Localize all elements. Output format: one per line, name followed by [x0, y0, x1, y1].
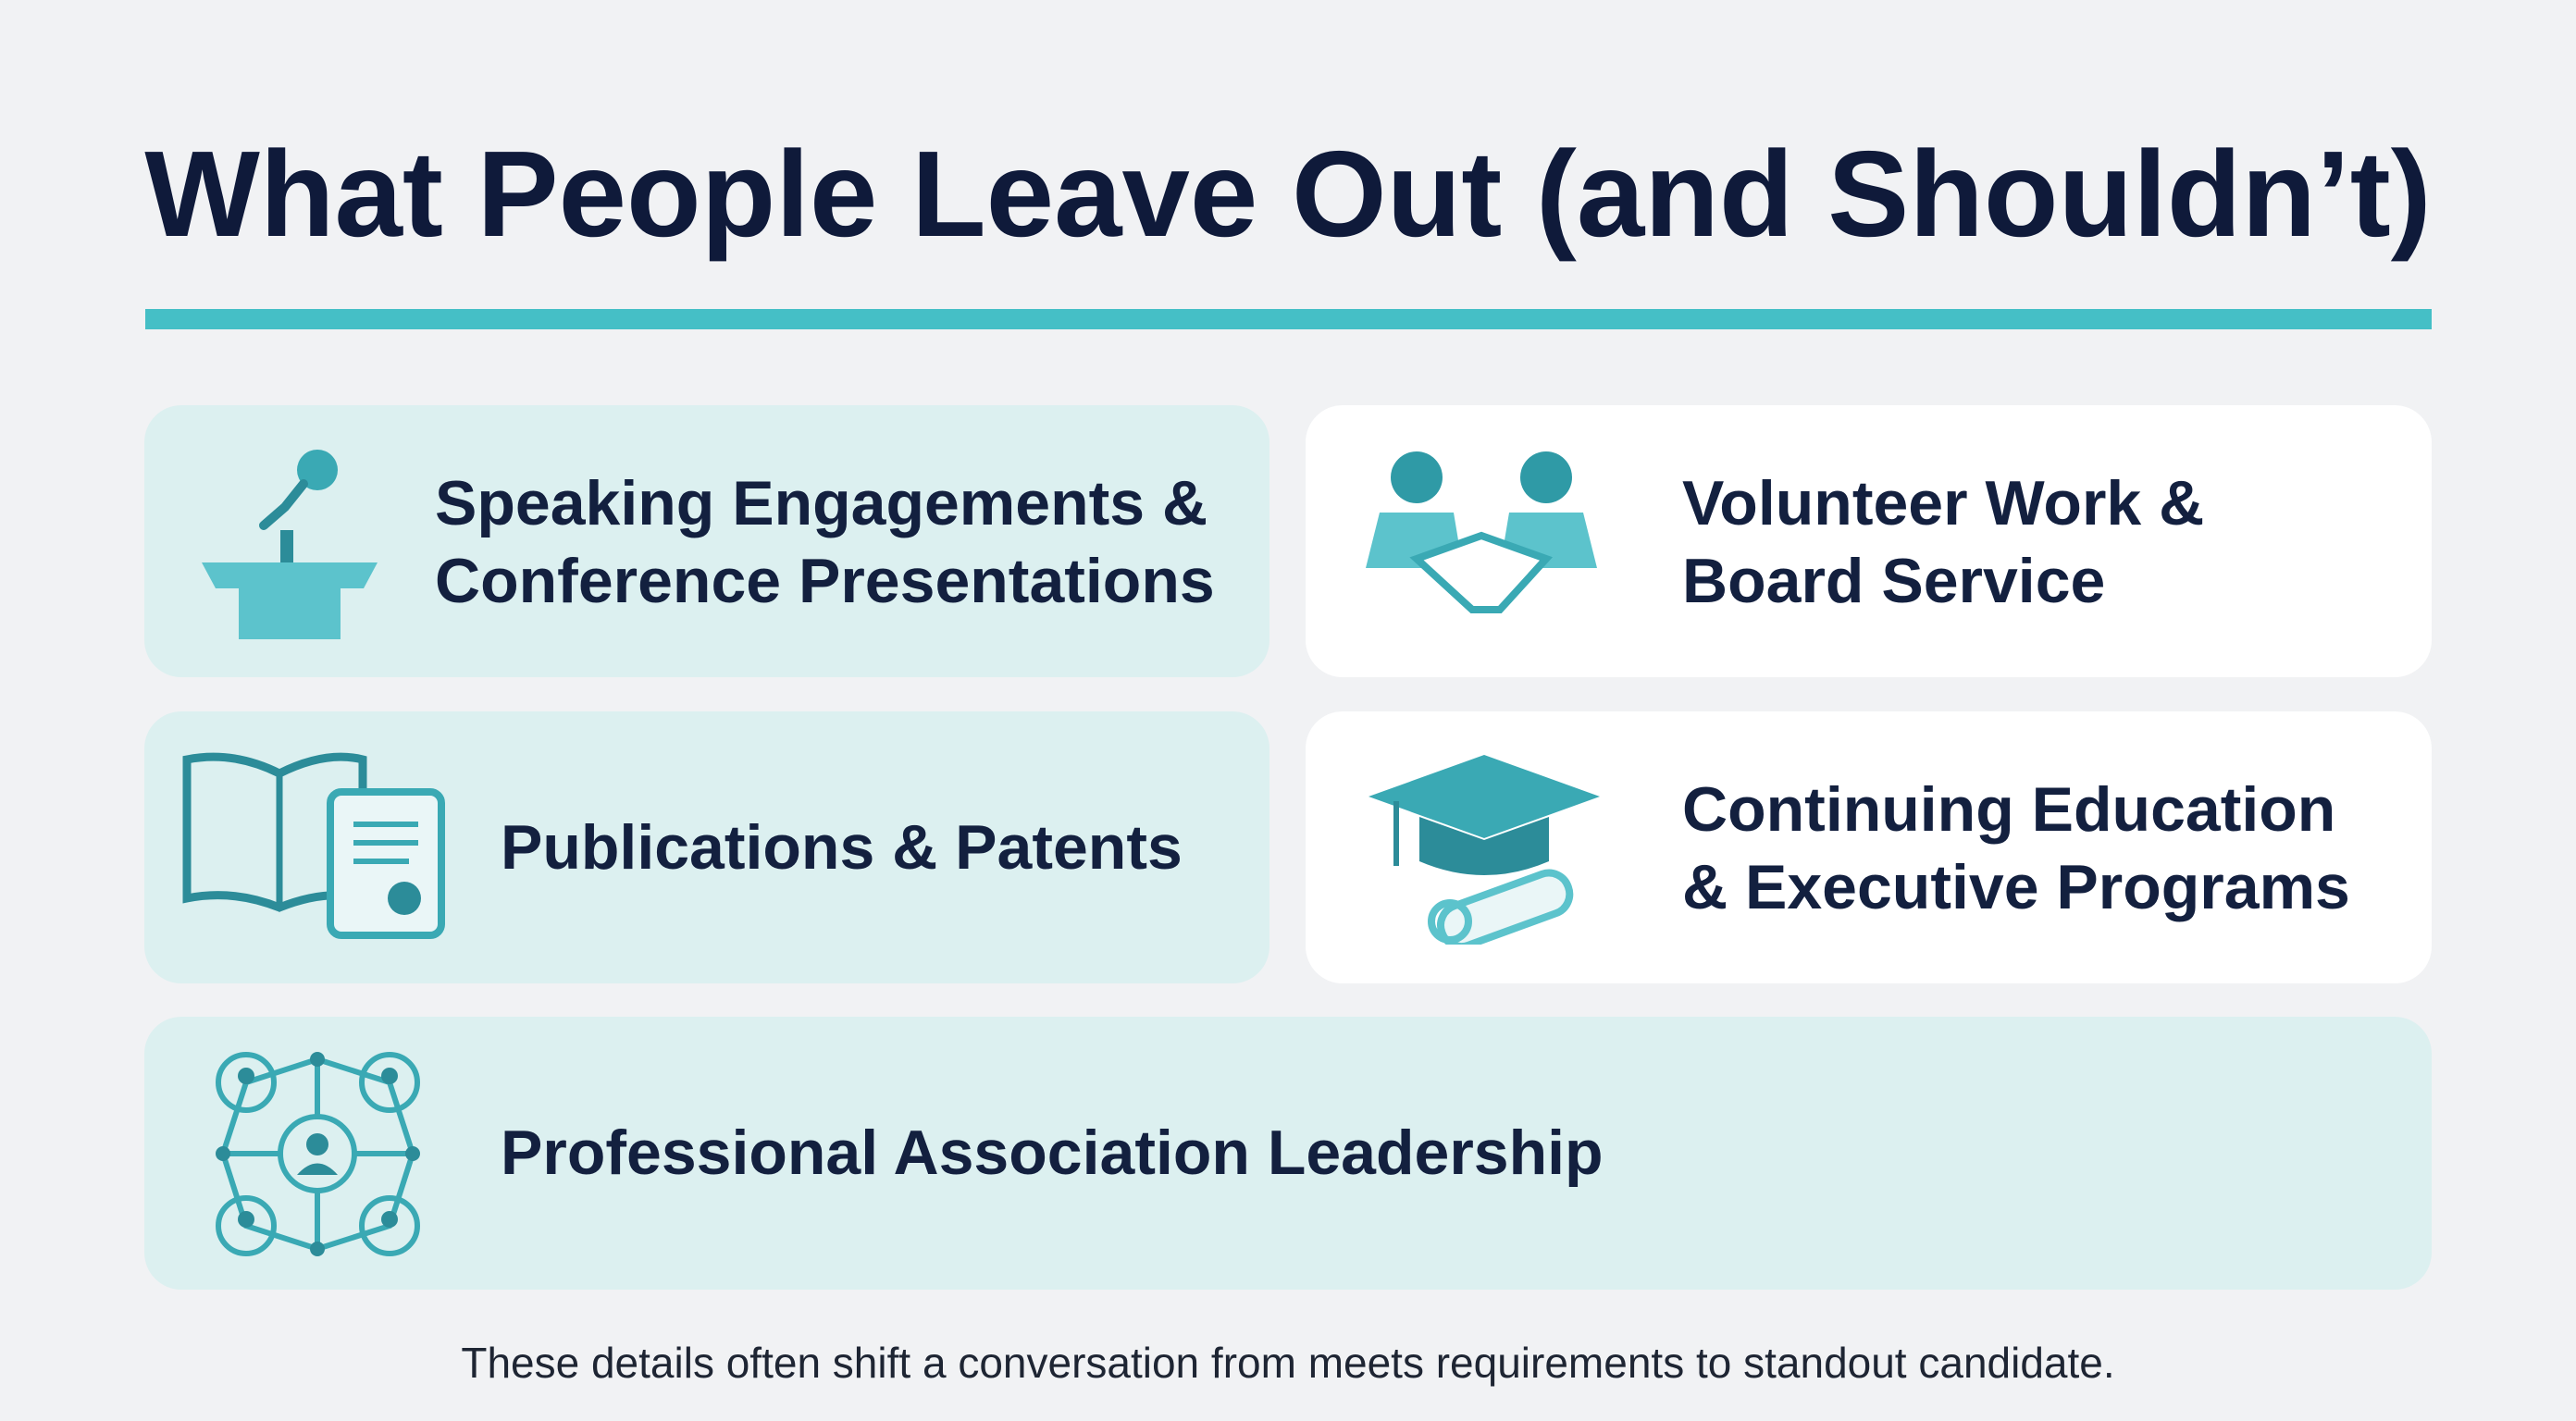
panel: continuing education [1306, 711, 2432, 983]
panel: professional association leadership [144, 1017, 2432, 1290]
text: Volunteer Work & [1682, 468, 2204, 538]
icon: network of people [216, 1052, 420, 1256]
text: Continuing Education [1682, 774, 2335, 845]
text: Conference Presentations [435, 546, 1215, 616]
text [1682, 468, 2204, 616]
icon: book and certificate [183, 753, 445, 939]
text [435, 468, 1215, 616]
text: Publications & Patents [501, 812, 1183, 883]
panel: publications [144, 711, 1269, 983]
icon: podium microphone [202, 450, 378, 639]
text: Speaking Engagements & [435, 468, 1208, 538]
footer note: These details often shift a conversation from meets requirements to standout candidate. [461, 1339, 2115, 1387]
text [1682, 774, 2350, 922]
panel: speaking engagements [144, 405, 1269, 677]
icon: handshake [1366, 451, 1597, 613]
panel: volunteer work [1306, 405, 2432, 677]
text: Board Service [1682, 546, 2105, 616]
text: Professional Association Leadership [501, 1118, 1604, 1188]
title: What People Leave Out (and Shouldn’t) [144, 126, 2432, 262]
icon: graduation cap and diploma [1368, 755, 1600, 945]
text: & Executive Programs [1682, 852, 2350, 922]
